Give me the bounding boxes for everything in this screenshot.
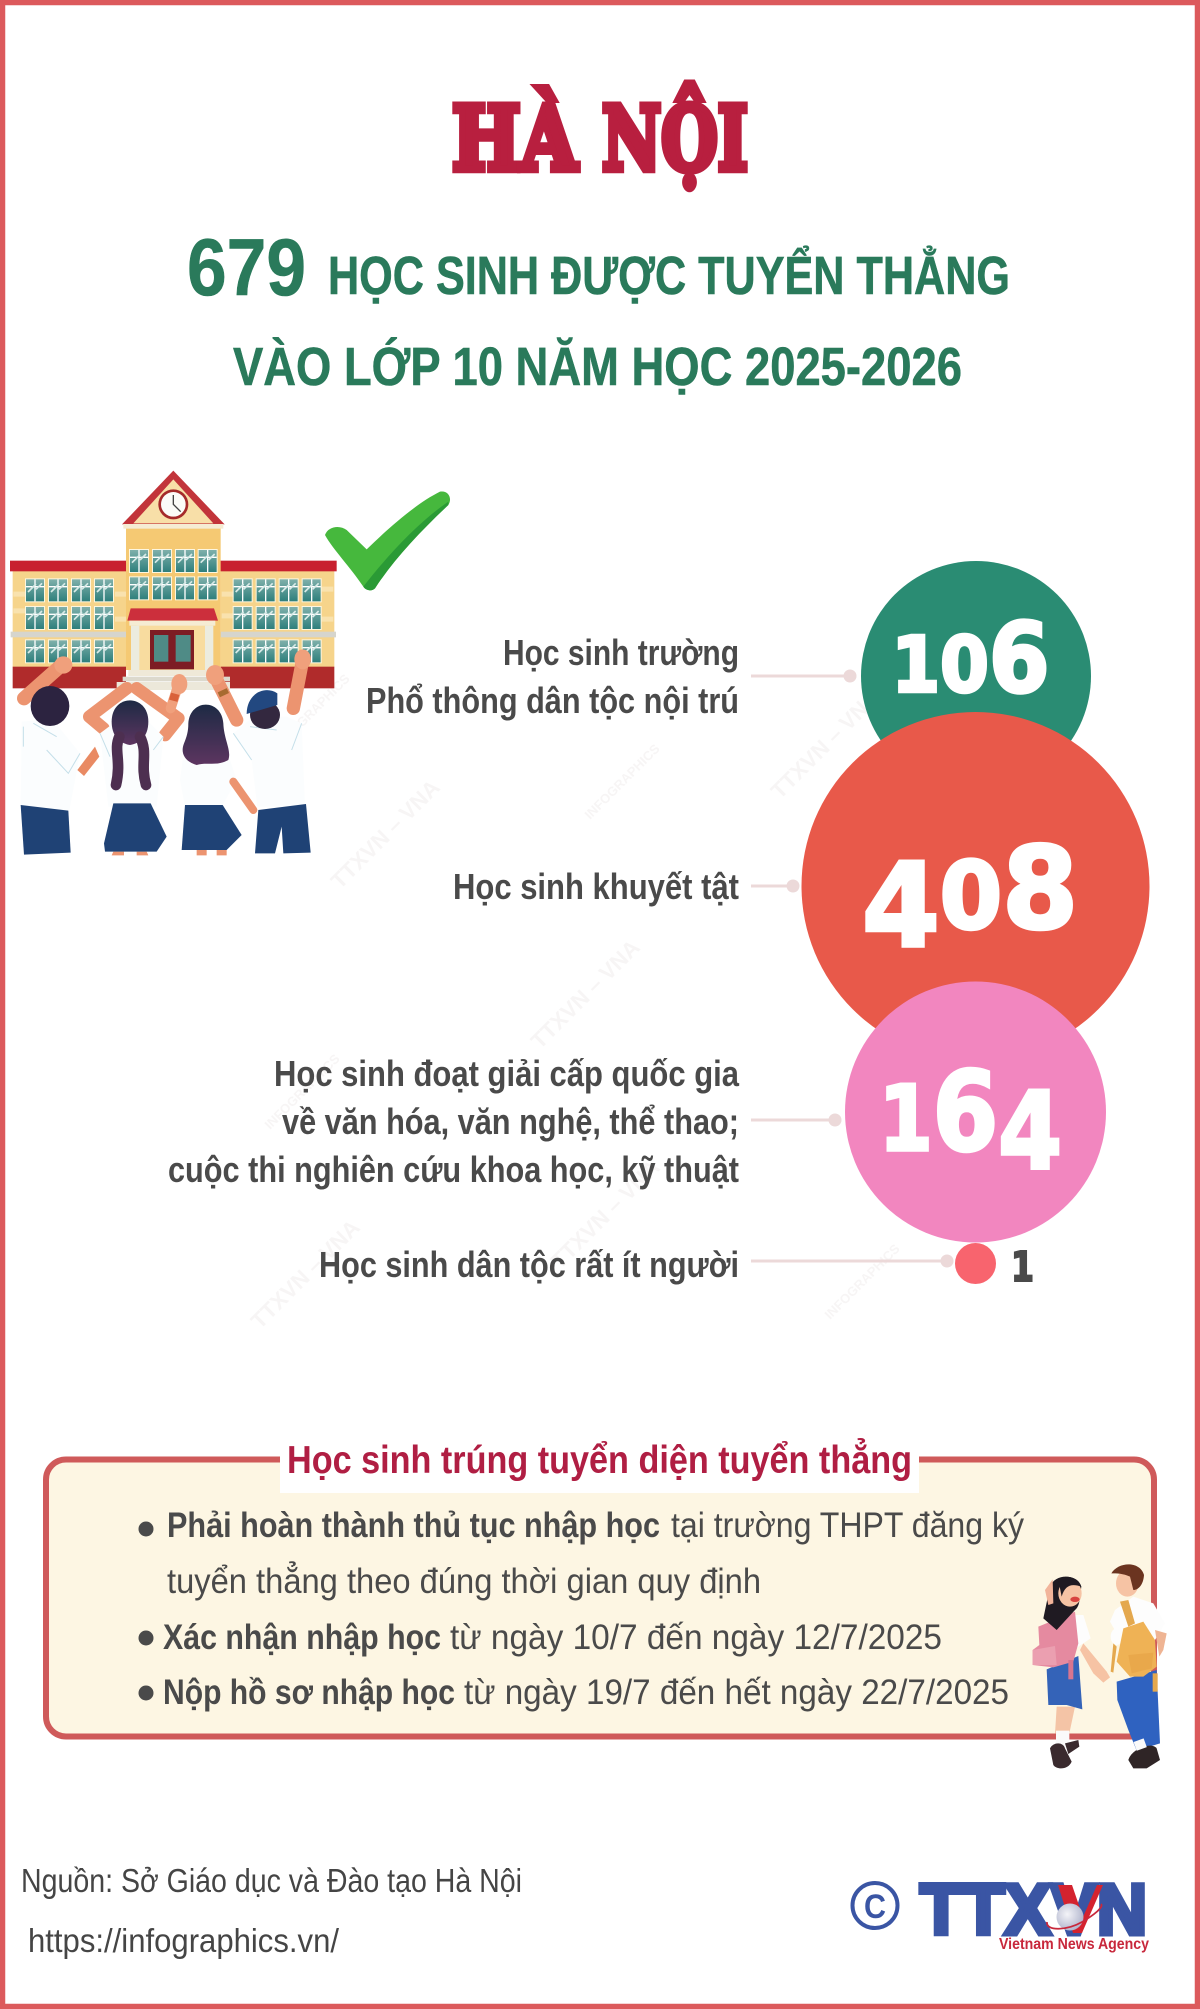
value 164: 16	[879, 1048, 1009, 1176]
value 1: 1	[1011, 1243, 1034, 1291]
watermarks: TTXVN – VNA	[246, 1215, 365, 1334]
label: students with disabilities: Học sinh khuyết tật	[453, 866, 739, 907]
student 3	[169, 674, 253, 855]
watermarks: INFOGRAPHICS	[272, 671, 353, 752]
item: submit documents: Nộp hồ sơ nhập học	[163, 1673, 455, 1712]
bubble: 164	[845, 982, 1106, 1242]
website link: https://infographics.vn/	[28, 1922, 340, 1959]
value 408: 4	[862, 839, 940, 974]
icon: red V overlay	[1058, 1885, 1103, 1933]
icon: globe swoosh	[1047, 1904, 1102, 1930]
girl	[1033, 1577, 1110, 1768]
item: complete enrolment: Phải hoàn thành thủ tục nhập học	[167, 1506, 660, 1545]
boy	[1110, 1564, 1167, 1768]
logo tagline: Vietnam News Agency	[999, 1936, 1149, 1953]
watermarks: INFOGRAPHICS	[262, 1051, 343, 1132]
item: complete enrolment	[138, 1506, 1024, 1601]
label: national prize winners: về văn hóa, văn nghệ, thể thao;	[282, 1101, 739, 1142]
logo: TTXVN	[852, 1871, 1149, 1953]
bubble: 106	[861, 561, 1091, 791]
source note: Nguồn: Sở Giáo dục và Đào tạo Hà Nội	[21, 1862, 522, 1899]
item: complete enrolment: tuyển thẳng theo đúng thời gian quy định	[167, 1561, 761, 1601]
students	[21, 649, 311, 855]
student 4	[206, 649, 311, 853]
bubble: 408	[802, 712, 1150, 1060]
item: confirm enrolment	[138, 1618, 942, 1657]
title: Hà Nội	[452, 82, 748, 190]
watermarks: INFOGRAPHICS	[822, 1241, 903, 1322]
watermarks: TTXVN – VNA	[326, 775, 445, 894]
label: boarding school students: Học sinh trường	[503, 632, 739, 673]
bubble: 1	[955, 1243, 996, 1284]
label: boarding school students	[366, 632, 739, 721]
label: boarding school students: Phổ thông dân tộc nội trú	[366, 680, 739, 721]
icon: green check mark	[325, 491, 450, 590]
subtitle: VÀO LỚP 10 NĂM HỌC 2025-2026	[233, 337, 962, 397]
icon: copyright mark	[852, 1883, 898, 1928]
connector lines	[751, 670, 954, 1268]
title: Hà Nội: NỘI	[602, 82, 748, 190]
item: confirm enrolment: Xác nhận nhập học	[163, 1618, 441, 1657]
title: Hà Nội: HÀ	[452, 86, 578, 190]
label: very small ethnic minority students: Học sinh dân tộc rất ít người	[319, 1244, 739, 1285]
student 2	[89, 688, 178, 855]
student 1	[21, 656, 99, 855]
watermarks	[246, 671, 903, 1334]
label: national prize winners: Học sinh đoạt giải cấp quốc gia	[274, 1053, 740, 1094]
item: confirm enrolment: từ ngày 10/7 đến ngày 12/7/2025	[450, 1618, 942, 1657]
logo wordmark: TTXVN	[920, 1871, 1147, 1950]
watermarks: TTXVN – VNA	[546, 1155, 665, 1274]
illustration: two students with backpacks	[1033, 1564, 1167, 1768]
subtitle: HỌC SINH ĐƯỢC TUYỂN THẲNG	[328, 246, 1010, 306]
icon: copyright mark: C	[864, 1888, 886, 1926]
value 164: 4	[998, 1070, 1062, 1194]
panel heading: Học sinh trúng tuyển diện tuyển thẳng	[287, 1437, 912, 1482]
watermarks: TTXVN – VNA	[526, 935, 645, 1054]
label: national prize winners	[168, 1053, 740, 1190]
panel heading	[280, 1437, 919, 1493]
bubble chart	[802, 561, 1150, 1291]
panel: admission steps	[46, 1437, 1154, 1736]
value 106: 106	[892, 602, 1050, 714]
item: complete enrolment: tại trường THPT đăng ký	[671, 1506, 1024, 1545]
illustration: school and students	[10, 471, 450, 855]
icon: school building	[10, 471, 337, 690]
watermarks: INFOGRAPHICS	[582, 741, 663, 822]
item: submit documents: từ ngày 19/7 đến hết ngày 22/7/2025	[464, 1673, 1009, 1712]
value 408: 8	[1002, 823, 1078, 955]
subtitle	[187, 223, 1010, 397]
label: national prize winners: cuộc thi nghiên cứu khoa học, kỹ thuật	[168, 1149, 739, 1190]
subtitle: 679	[187, 223, 306, 313]
value 408: 0	[940, 842, 1002, 950]
watermarks: TTXVN – VNA	[766, 685, 885, 804]
item: submit documents	[138, 1673, 1009, 1712]
